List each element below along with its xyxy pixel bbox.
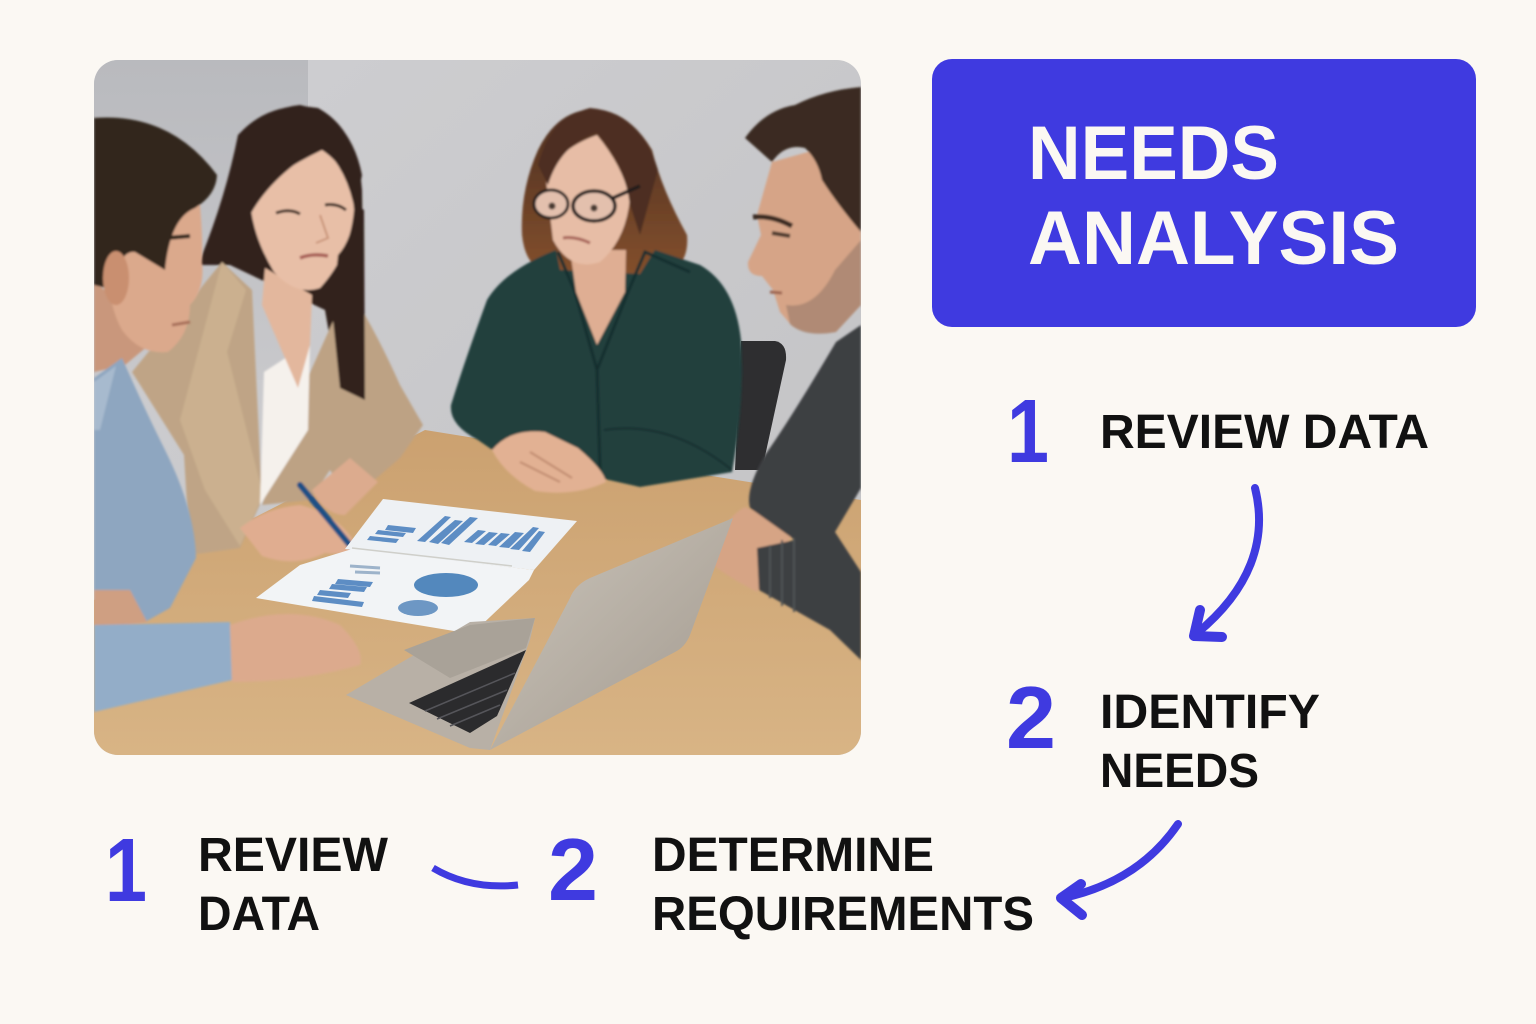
beard <box>786 240 861 334</box>
title: NEEDS <box>1028 111 1279 196</box>
step: bottom 1 review data: DATA <box>198 888 320 941</box>
step: 2 identify needs: IDENTIFY <box>1100 686 1320 739</box>
neck <box>94 284 145 373</box>
face <box>109 205 202 352</box>
blazer <box>132 262 262 555</box>
step: bottom 2 determine requirements: 2 <box>548 820 598 919</box>
hair <box>94 117 217 290</box>
step: 1 review data <box>1007 382 1429 482</box>
step: bottom 1 review data <box>105 821 389 941</box>
ear <box>103 251 129 305</box>
table <box>94 430 861 755</box>
step: 2 identify needs: NEEDS <box>1100 745 1259 798</box>
arrow: review data to identify needs <box>1194 488 1259 637</box>
hand <box>230 614 361 682</box>
step: 2 identify needs: 2 <box>1006 668 1056 767</box>
hair back <box>200 105 364 332</box>
title <box>1028 111 1399 281</box>
glasses <box>534 190 568 218</box>
chair <box>735 341 786 470</box>
title banner <box>932 59 1476 327</box>
hair front <box>248 104 364 213</box>
step: 2 identify needs <box>1006 668 1320 798</box>
hands and pen <box>312 458 378 515</box>
hair back <box>522 110 687 276</box>
step: bottom 2 determine requirements: DETERMINE <box>652 829 934 882</box>
sweater <box>749 325 861 660</box>
face <box>546 135 630 264</box>
hair top <box>538 108 658 235</box>
face <box>250 150 354 290</box>
hair <box>745 87 861 232</box>
neck and top <box>260 342 310 505</box>
charts on paper <box>256 499 577 634</box>
step: bottom 1 review data: 1 <box>105 821 147 921</box>
step: bottom 2 determine requirements <box>548 820 1034 941</box>
hands <box>492 431 606 493</box>
title: ANALYSIS <box>1028 196 1399 281</box>
neck <box>570 250 626 345</box>
forearm <box>94 590 147 628</box>
sleeve <box>94 622 232 712</box>
step: 1 review data: REVIEW DATA <box>1100 406 1429 459</box>
person: woman with glasses <box>451 108 742 493</box>
photo: team meeting around a table <box>94 60 861 755</box>
person: woman in tan blazer <box>132 105 423 567</box>
connector curve <box>433 868 518 886</box>
face <box>748 150 861 333</box>
step: bottom 2 determine requirements: REQUIREMENTS <box>652 888 1034 941</box>
arrow: identify needs to determine requirements <box>1061 824 1178 915</box>
laptop <box>346 518 733 750</box>
shirt <box>451 250 742 487</box>
step: bottom 1 review data: REVIEW <box>198 829 389 882</box>
shirt <box>94 358 196 625</box>
person: man on the right <box>713 87 861 660</box>
step: 1 review data: 1 <box>1007 382 1049 482</box>
hand <box>713 507 795 592</box>
person: man on the left <box>94 117 361 712</box>
